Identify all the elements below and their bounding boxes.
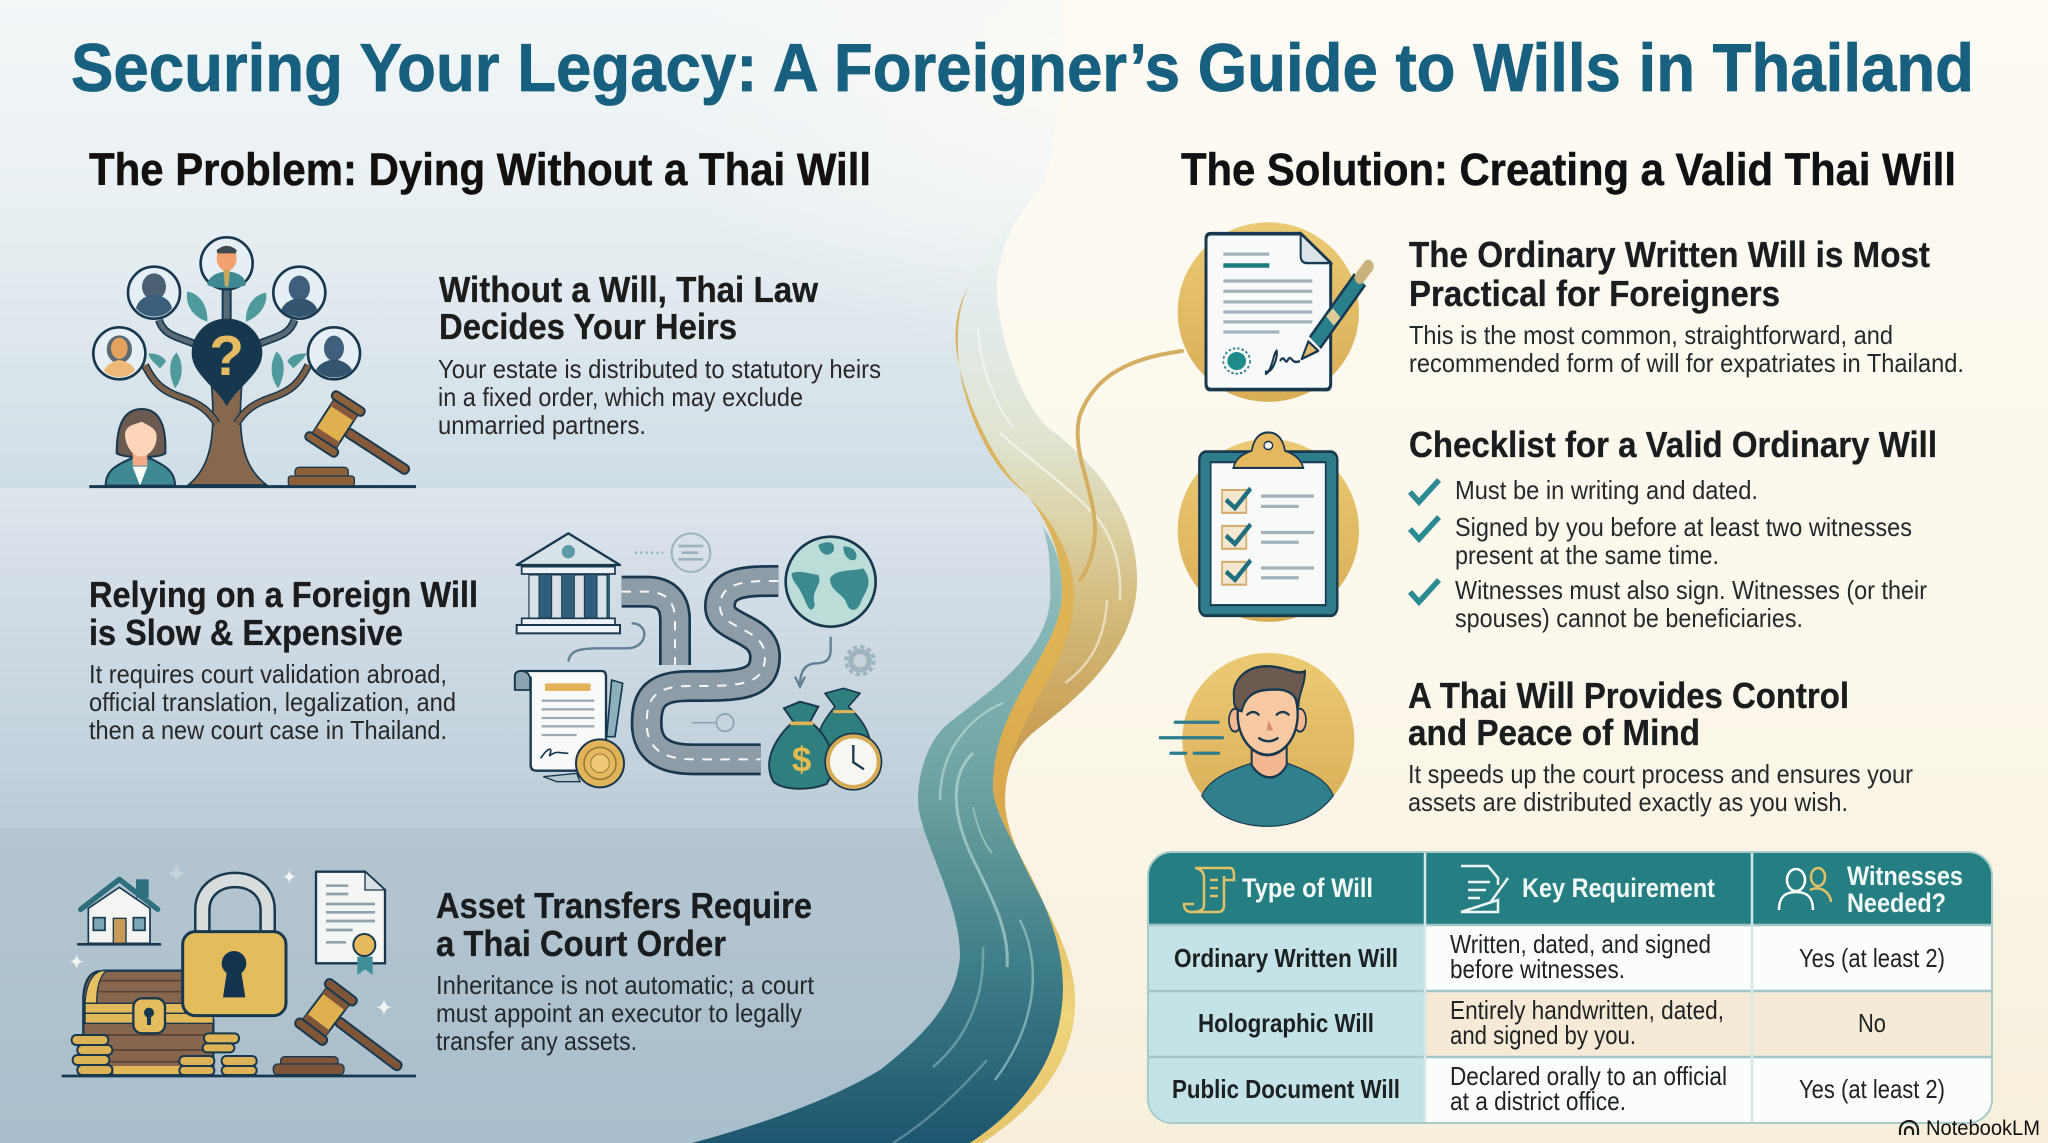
comparison table: at a district office.: [1450, 1086, 1626, 1116]
text block: asset transfers: must appoint an executor to legally: [436, 998, 802, 1028]
text block: foreign will slow and expensive: Relying on a Foreign Will: [89, 574, 478, 615]
title: Securing Your Legacy: A Foreigner’s Guide to Wills in Thailand: [71, 30, 1974, 106]
comparison table: and signed by you.: [1450, 1020, 1636, 1050]
comparison table: Yes (at least 2): [1799, 943, 1945, 973]
comparison table: Entirely handwritten, dated,: [1450, 995, 1724, 1025]
text block: thai law decides heirs: Decides Your Heirs: [439, 306, 737, 347]
text block: checklist: Signed by you before at least two witnesses: [1455, 512, 1912, 542]
text block: foreign will slow and expensive: is Slow & Expensive: [89, 612, 403, 653]
table header icon: scroll: [1184, 868, 1234, 912]
text block: asset transfers: transfer any assets.: [436, 1026, 637, 1056]
table header icon: document and pen: [1461, 866, 1508, 912]
comparison table: Type of Will: [1242, 873, 1373, 903]
comparison table: Needed?: [1847, 888, 1946, 918]
text block: ordinary written will: This is the most common, straightforward, and: [1409, 320, 1893, 350]
text block: foreign will slow and expensive: [89, 574, 478, 745]
panel: problem side background bands: [0, 0, 1200, 1143]
text block: thai law decides heirs: in a fixed order, which may exclude: [438, 382, 803, 412]
comparison table: before witnesses.: [1450, 954, 1625, 984]
text block: ordinary written will: recommended form of will for expatriates in Thailand.: [1409, 348, 1964, 378]
text block: foreign will slow and expensive: It requires court validation abroad,: [89, 659, 447, 689]
text block: asset transfers: [436, 885, 815, 1056]
icon: clipboard checklist: [1178, 432, 1359, 622]
table header icon: people: [1779, 868, 1831, 910]
icon: signed document with pen: [1178, 222, 1368, 402]
flowing ribbon divider: [692, 185, 1182, 1143]
text block: ordinary written will: The Ordinary Written Will is Most: [1409, 234, 1930, 275]
logo: NotebookLM watermark: NotebookLM: [1926, 1117, 2040, 1140]
icon: courthouse, winding road, globe, money and clock: [515, 533, 881, 790]
text block: peace of mind: A Thai Will Provides Control: [1408, 675, 1849, 716]
text block: ordinary written will: [1409, 234, 1964, 378]
comparison table: Public Document Will: [1172, 1074, 1400, 1104]
text block: foreign will slow and expensive: then a new court case in Thailand.: [89, 715, 447, 745]
comparison table: Holographic Will: [1198, 1008, 1374, 1038]
comparison table: Key Requirement: [1522, 873, 1715, 903]
text block: asset transfers: a Thai Court Order: [436, 923, 726, 964]
text block: peace of mind: It speeds up the court process and ensures your: [1408, 759, 1913, 789]
text block: asset transfers: Inheritance is not automatic; a court: [436, 970, 815, 1000]
text block: thai law decides heirs: Without a Will, Thai Law: [439, 269, 819, 310]
comparison table: Yes (at least 2): [1799, 1074, 1945, 1104]
text block: thai law decides heirs: unmarried partners.: [438, 410, 646, 440]
text block: peace of mind: and Peace of Mind: [1408, 712, 1700, 753]
text block: asset transfers: Asset Transfers Require: [436, 885, 812, 926]
text block: ordinary written will: Practical for Foreigners: [1409, 273, 1780, 314]
icon: courthouse, winding road, globe, money and clock: $: [792, 741, 811, 780]
icon: padlock, treasure chest, house, document and gavel: [62, 863, 418, 1092]
text block: checklist: Must be in writing and dated.: [1455, 475, 1758, 505]
text block: checklist: [1409, 424, 1937, 633]
text block: checklist: Witnesses must also sign. Witnesses (or their: [1455, 575, 1927, 605]
comparison table: Ordinary Written Will: [1174, 943, 1398, 973]
heading: the solution: The Solution: Creating a Valid Thai Will: [1181, 144, 1956, 195]
heading: the problem: The Problem: Dying Without a Thai Will: [89, 144, 871, 195]
icon: smiling man: [1160, 653, 1354, 826]
text block: checklist: spouses) cannot be beneficiaries.: [1455, 603, 1803, 633]
text block: thai law decides heirs: [438, 269, 881, 440]
text block: peace of mind: [1408, 675, 1913, 817]
comparison table: Written, dated, and signed: [1450, 929, 1711, 959]
comparison table: No: [1858, 1008, 1886, 1038]
text block: checklist: Checklist for a Valid Ordinary Will: [1409, 424, 1937, 465]
check marks: [1410, 480, 1439, 602]
icon: family tree with question mark and gavel: ?: [209, 325, 244, 388]
comparison table: [1148, 852, 1992, 1123]
text block: thai law decides heirs: Your estate is distributed to statutory heirs: [438, 354, 881, 384]
text block: peace of mind: assets are distributed exactly as you wish.: [1408, 787, 1848, 817]
text block: foreign will slow and expensive: official translation, legalization, and: [89, 687, 456, 717]
text block: checklist: present at the same time.: [1455, 540, 1719, 570]
comparison table: Witnesses: [1847, 861, 1963, 891]
comparison table: Declared orally to an official: [1450, 1061, 1727, 1091]
icon: family tree with question mark and gavel: [89, 237, 424, 496]
